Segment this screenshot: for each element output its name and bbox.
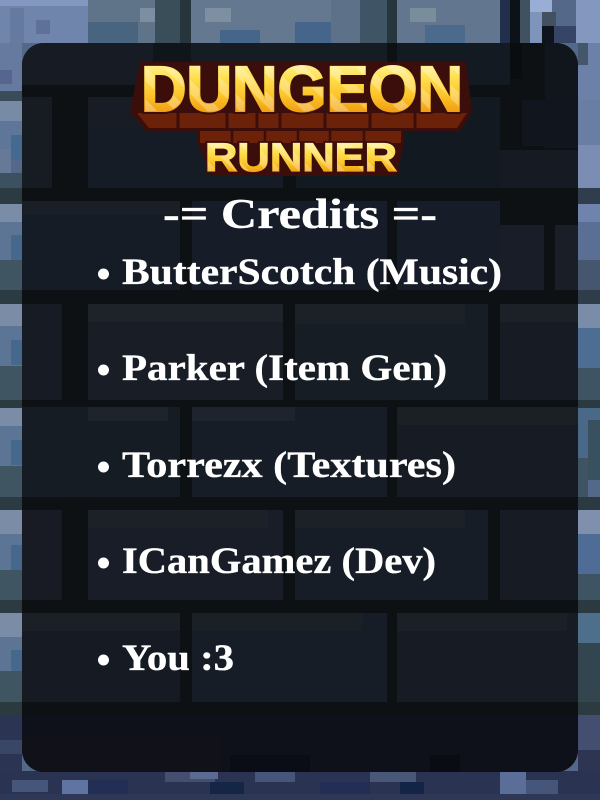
logo extrusion block: [130, 62, 472, 131]
logo: Dungeon Runner: RUNNER: [205, 136, 397, 180]
logo: Dungeon Runner: [130, 53, 472, 180]
logo: Dungeon Runner: DUNGEON: [141, 53, 463, 125]
item: ICanGamez: ICanGamez (Dev): [122, 541, 436, 582]
logo: Dungeon Runner: DUNGEON: [141, 53, 463, 125]
item: ButterScotch: ButterScotch (Music): [122, 252, 502, 293]
list: credits: [98, 252, 502, 679]
item: Torrezx: Torrezx (Textures): [122, 445, 456, 486]
logo word: RUNNER: RUNNER: [205, 136, 397, 180]
item: Parker: Parker (Item Gen): [122, 348, 447, 389]
logo word: DUNGEON: DUNGEON: [141, 53, 463, 125]
heading: Credits: -= Credits =-: [163, 192, 437, 238]
logo: Dungeon Runner: RUNNER: [205, 136, 397, 180]
item: You: You :3: [122, 638, 234, 679]
